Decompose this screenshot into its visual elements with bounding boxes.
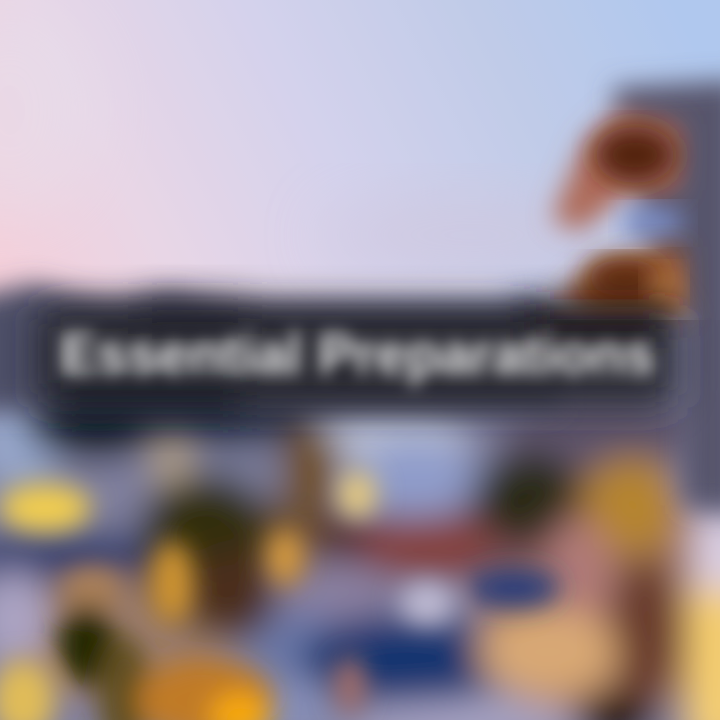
panel: town and garden foreground — [0, 380, 720, 720]
title: Essential Preparations — [60, 322, 655, 387]
icon: plants and lit pool details — [0, 471, 560, 720]
panel: dark title banner — [38, 300, 678, 418]
panel: building with balconies — [552, 80, 720, 510]
panel: distant hills — [0, 284, 560, 410]
panel: sky background — [0, 0, 720, 320]
